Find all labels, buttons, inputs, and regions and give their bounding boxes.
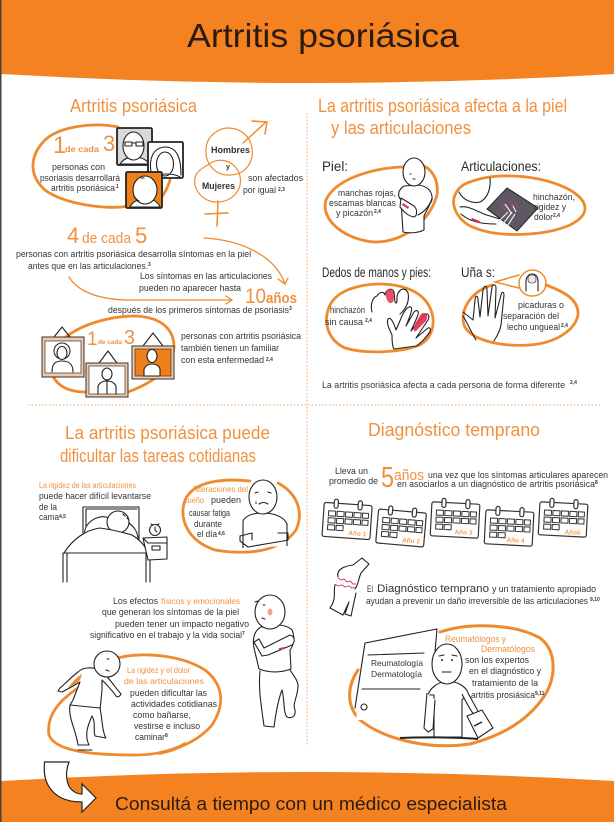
text: 10 años: 3 — [289, 306, 292, 312]
sub-panel: dedos — [322, 264, 433, 352]
callout: especialistas: Dermatología — [371, 669, 422, 679]
icon: portrait orange — [126, 172, 162, 208]
text: 4 de cada 5: 3 — [148, 262, 151, 268]
callout: rigidez y dolor: caminar — [135, 732, 165, 742]
sub-panel: piel: manchas rojas, — [338, 188, 396, 198]
icon: gender circles: Hombres — [211, 145, 250, 155]
heading: La artritis psoriásica afecta a la piel — [318, 96, 567, 116]
text: efectos: Los efectos — [113, 596, 159, 606]
callout: 1 de cada 3: personas con — [52, 162, 105, 172]
callout: rigidez y dolor: de las articulaciones — [124, 676, 204, 686]
text: 5 años: 5 — [381, 462, 394, 494]
text: 4 de cada 5: personas con artritis psoriásica desarrolla síntomas en la piel — [16, 249, 251, 259]
text: 4 de cada 5: 5 — [135, 223, 147, 248]
icon: tired person — [240, 480, 288, 548]
icon: standing person — [253, 595, 298, 727]
sub-panel: dedos: Dedos de manos y pies: — [322, 264, 431, 280]
text: 5 años: años — [394, 467, 424, 484]
note: La artritis psoriásica afecta a cada persona de forma diferente — [322, 380, 565, 390]
calendar year 1: Año 1 — [348, 530, 367, 538]
callout: sueño: Alteraciones del — [192, 484, 248, 494]
callout: rigidez y dolor: 8 — [165, 733, 168, 739]
callout: especialistas: 9,11 — [535, 691, 545, 697]
text: 5 años: 8 — [595, 480, 598, 486]
text: 4 de cada 5: 4 — [67, 223, 79, 248]
text: efectos: que generan los síntomas de la piel — [102, 607, 239, 617]
text: efectos — [90, 596, 249, 640]
callout: sueño: 4,6 — [218, 531, 225, 537]
sub-panel: articulaciones: Articulaciones: — [461, 158, 541, 174]
icon: joint — [330, 558, 369, 616]
text: 5 años: Lleva un — [335, 466, 368, 476]
footer banner — [2, 762, 614, 822]
text: efectos: 7 — [242, 631, 245, 637]
icon: gender circles: Mujeres — [202, 181, 235, 191]
callout: sueño: el día — [197, 529, 217, 539]
heading — [318, 96, 567, 138]
title banner: Artritis psoriásica — [187, 17, 460, 54]
note: 2,4 — [570, 380, 577, 386]
callout: sueño — [183, 480, 299, 552]
heading: Diagnóstico temprano — [368, 420, 540, 440]
callout: 1 de cada 3: de cada — [65, 144, 99, 154]
icon: gender circles: 2,3 — [278, 187, 285, 193]
callout: family frames: 1 — [87, 329, 98, 350]
callout: especialistas: Dermatólogos — [481, 644, 536, 654]
icon: person with skin patch — [399, 158, 432, 233]
calendar year 2 — [376, 505, 427, 547]
text: diagnóstico temprano: y un tratamiento apropiado — [492, 584, 596, 594]
text: rigidez: La rigidez de las articulaciones — [39, 481, 136, 490]
callout: rigidez y dolor: actividades cotidianas — [131, 699, 218, 709]
callout: 1 de cada 3 — [33, 125, 170, 207]
text: 10 años: 10 — [245, 285, 266, 308]
text: 4 de cada 5: de cada — [82, 231, 132, 247]
callout: family frames: con esta enfermedad — [181, 355, 264, 365]
text: rigidez: cama — [39, 512, 59, 522]
icon: doctor — [400, 644, 493, 739]
callout: especialistas: son los expertos — [465, 655, 530, 665]
text: 4 de cada 5 — [16, 223, 251, 271]
callout: sueño: durante — [194, 519, 222, 529]
callout: 1 de cada 3: 1 — [116, 184, 119, 190]
icon: portrait man — [117, 128, 152, 165]
text: diagnóstico temprano: 9,10 — [590, 597, 600, 603]
text: 4 de cada 5: antes que en las articulaciones. — [28, 261, 148, 271]
text: 5 años: promedio de — [329, 476, 378, 486]
calendar year 1 — [322, 498, 372, 540]
sub-panel: piel — [322, 158, 437, 242]
callout: family frames: también tienen un familiar — [181, 343, 279, 353]
sub-panel: articulaciones: rigidez y — [534, 202, 567, 212]
callout: sueño: causar fatiga — [189, 508, 230, 518]
icon: gender circles: y — [226, 164, 230, 171]
text: rigidez: de la — [39, 502, 57, 512]
sub-panel: uñas: picaduras o — [518, 300, 564, 310]
icon: door — [355, 629, 437, 720]
sub-panel: dedos: sin causa — [325, 317, 363, 327]
text: 5 años — [329, 462, 608, 494]
sub-panel: uñas: 2,4 — [561, 323, 568, 329]
heading: y las articulaciones — [331, 118, 471, 138]
icon: hand and nail — [463, 274, 538, 341]
heading — [60, 423, 270, 466]
callout: family frames — [42, 316, 301, 397]
icon: gender circles — [195, 121, 304, 226]
panel: piel y articulaciones — [318, 96, 585, 390]
callout: rigidez y dolor: como bañarse, — [133, 710, 191, 720]
sub-panel: uñas: Uña s: — [461, 264, 495, 280]
callout: family frames: personas con artritis psoriásica — [181, 331, 301, 341]
callout: rigidez y dolor — [49, 651, 221, 755]
sub-panel: articulaciones: 2,4 — [553, 213, 560, 219]
sub-panel: piel: y picazón — [336, 208, 373, 218]
arrow: right curve — [204, 238, 288, 284]
calendar year 2: Año 2 — [402, 537, 421, 546]
calendar year 5 — [538, 498, 588, 537]
sub-panel: articulaciones: dolor — [534, 212, 553, 222]
callout: especialistas — [350, 626, 553, 746]
heading: Artritis psoriásica — [70, 96, 198, 116]
text: 5 años: en asociarlos a un diagnóstico de artritis psoriásica — [397, 479, 595, 489]
text: diagnóstico temprano: ayudan a prevenir un daño irreversible de las articulaciones — [366, 596, 589, 606]
sub-panel: uñas — [461, 264, 578, 345]
callout: 1 de cada 3: psoriasis desarrollará — [40, 173, 120, 183]
calendar year 4: Año 4 — [506, 537, 525, 545]
sub-panel: piel: 2,4 — [374, 209, 381, 215]
title banner — [2, 0, 614, 83]
calendar year 5: Año5 — [564, 529, 581, 537]
icon: joint x-ray — [459, 178, 538, 231]
text: 10 años: años — [266, 291, 297, 307]
icon: bent person — [58, 651, 121, 750]
text: efectos: significativo en el trabajo y la vida social — [90, 630, 242, 640]
text: rigidez: 4,5 — [59, 514, 66, 520]
text: diagnóstico temprano: Diagnóstico temprano — [377, 583, 489, 595]
callout: especialistas: Reumatología — [371, 658, 423, 668]
callout: especialistas: artritis prosiásica — [471, 690, 535, 700]
icon: frame grandmother — [42, 327, 84, 377]
icon: bed — [63, 507, 167, 582]
heading: La artritis psoriásica puede — [65, 423, 270, 443]
calendar year 4 — [484, 506, 534, 546]
panel: diagnóstico temprano — [322, 420, 608, 746]
callout: rigidez y dolor: vestirse e incluso — [134, 721, 200, 731]
panel: tareas cotidianas — [39, 423, 299, 755]
icon: portrait woman — [148, 142, 183, 178]
text: 10 años — [108, 271, 297, 315]
icon: gender circles: son afectados — [248, 173, 304, 183]
text: 10 años: pueden no aparecer hasta — [139, 283, 241, 293]
icon: gender circles: por igual — [243, 185, 276, 195]
callout: rigidez y dolor: pueden dificultar las — [130, 688, 208, 698]
icon: frame man — [86, 351, 128, 397]
text: efectos: físicos y emocionales — [161, 596, 240, 606]
callout: family frames: de cada — [98, 340, 123, 346]
callout: rigidez y dolor: La rigidez y el dolor — [127, 665, 190, 675]
footer banner: Consultá a tiempo con un médico especialista — [115, 794, 508, 814]
calendar year 3 — [430, 498, 480, 538]
sub-panel: dedos: 2,4 — [365, 318, 372, 324]
callout: especialistas: en el diagnóstico y — [469, 666, 542, 676]
panel: artritis psoriásica statistics — [16, 96, 304, 397]
icon: frame orange — [132, 333, 174, 379]
text: diagnóstico temprano: El — [367, 584, 373, 594]
arrow: footer — [44, 762, 96, 812]
sub-panel: piel: Piel: — [322, 158, 348, 174]
text: 10 años: Los síntomas en las articulaciones — [140, 271, 273, 281]
calendar year 3: Año 3 — [454, 529, 473, 537]
sub-panel: uñas: lecho ungueal — [507, 322, 560, 332]
sub-panel: piel: escamas blancas — [329, 198, 397, 208]
callout: especialistas: tratamiento de la — [472, 678, 538, 688]
callout: 1 de cada 3: 1 — [53, 132, 66, 159]
callout: 1 de cada 3: artritis psoriásica — [51, 183, 115, 193]
sub-panel: dedos: hinchazón — [330, 305, 365, 315]
text: rigidez — [39, 481, 151, 522]
sub-panel: articulaciones: hinchazón, — [533, 192, 575, 202]
callout: 1 de cada 3: 3 — [103, 131, 115, 156]
sub-panel: articulaciones — [454, 158, 585, 234]
callout: family frames: 2,4 — [266, 357, 273, 363]
callout: especialistas: Reumatólogos y — [445, 634, 507, 644]
text: rigidez: puede hacer difícil levantarse — [39, 491, 151, 501]
icon: foot and hand — [371, 289, 430, 349]
callout: sueño: pueden — [211, 495, 241, 505]
sub-panel: uñas: separación del — [503, 311, 559, 321]
text: 5 años: una vez que los síntomas articulares aparecen — [428, 470, 608, 480]
text: efectos: pueden tener un impacto negativo — [115, 619, 249, 629]
text: 10 años: después de los primeros síntomas de psoriasis — [108, 305, 290, 315]
arrow: timeline — [69, 277, 232, 304]
callout: sueño: sueño — [184, 495, 204, 505]
heading: dificultar las tareas cotidianas — [60, 446, 256, 466]
text: diagnóstico temprano — [366, 583, 600, 606]
callout: family frames: 3 — [124, 327, 135, 349]
